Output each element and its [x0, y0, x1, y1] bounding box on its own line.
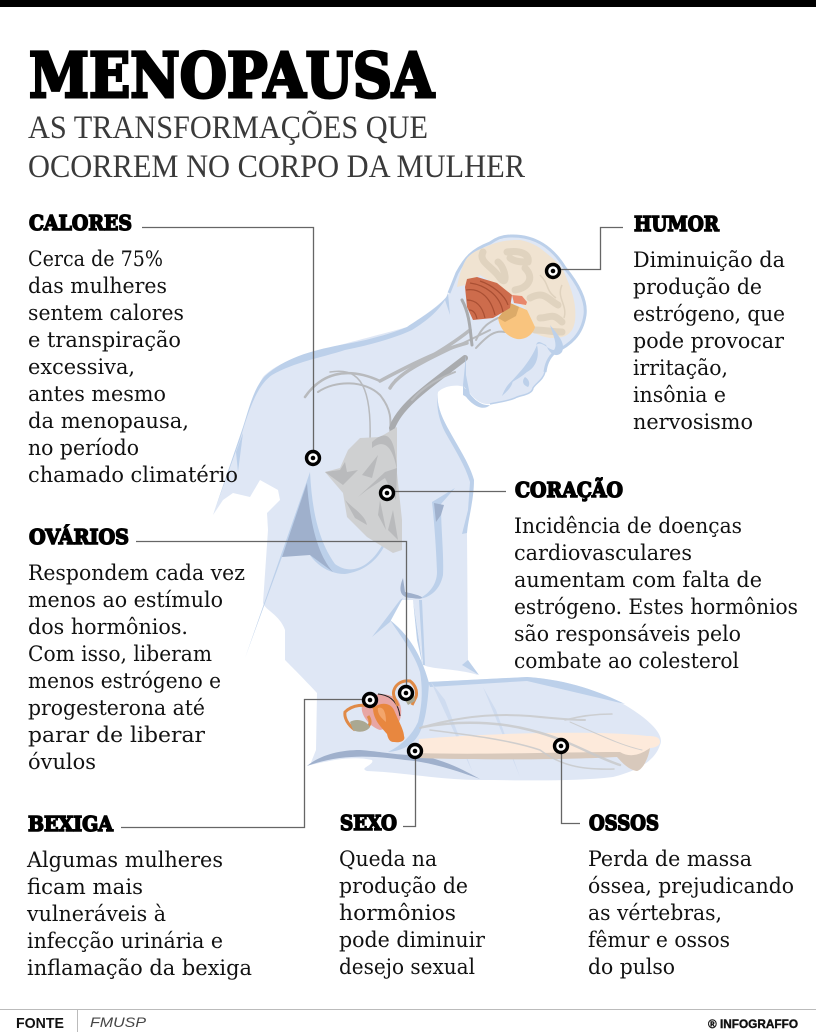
target marker: calores [306, 452, 320, 464]
panel: calores: e transpiração [28, 328, 181, 353]
panel: bexiga: Algumas mulheres [26, 848, 223, 873]
callout leader lines [121, 228, 623, 828]
panel: ovarios: parar de liberar [28, 723, 206, 748]
darker shadow folds [282, 483, 480, 779]
panel: humor [633, 212, 785, 435]
panel: ovarios: menos ao estímulo [28, 588, 223, 613]
panel: coracao: cardiovasculares [514, 541, 692, 566]
brain cortex [457, 240, 575, 338]
footer: FONTE [16, 1015, 64, 1032]
panel: ossos: OSSOS [589, 811, 659, 835]
cerebellum [465, 277, 512, 320]
panel: calores: CALORES [29, 211, 132, 235]
panel: sexo: SEXO [340, 811, 397, 835]
subtitle: AS TRANSFORMAÇÕES QUE [28, 109, 428, 146]
panel: ossos: do pulso [588, 955, 675, 980]
panel: calores: sentem calores [28, 301, 184, 326]
footer: ® INFOGRAFFO [708, 1017, 798, 1031]
panel: calores: excessiva, [28, 355, 135, 380]
panel: calores [28, 211, 238, 488]
target marker: sexo [408, 744, 422, 758]
panel: calores: no período [28, 436, 139, 461]
panel: ovarios: dos hormônios. [28, 615, 188, 640]
panel: ovarios [28, 525, 245, 775]
panel: humor: estrógeno, que [633, 302, 785, 327]
panel: humor: pode provocar [633, 329, 785, 354]
thigh veins [420, 714, 642, 769]
face details [463, 325, 563, 405]
footer: FMUSP [90, 1014, 147, 1030]
panel: bexiga: infecção urinária e [27, 929, 223, 954]
femur bone [419, 733, 660, 771]
blue body contours [213, 236, 625, 777]
panel: ossos: Perda de massa [588, 847, 752, 872]
footer [0, 1009, 816, 1032]
panel: ossos: óssea, prejudicando [588, 874, 794, 899]
panel: humor: HUMOR [634, 212, 720, 236]
panel: humor: Diminuição da [633, 248, 785, 273]
panel: coracao: CORAÇÃO [515, 478, 623, 502]
panel: ovarios: menos estrógeno e [28, 669, 221, 694]
panel: ossos: as vértebras, [588, 901, 722, 926]
panel: ovarios: óvulos [28, 750, 96, 775]
illustration: female body in profile [213, 236, 661, 780]
panel: sexo: hormônios [339, 901, 456, 926]
subtitle [28, 109, 525, 185]
panel: ossos [588, 811, 794, 980]
heart [325, 427, 402, 553]
nerves from brain to chest [305, 300, 505, 440]
target marker: ossos [554, 740, 568, 752]
panel: bexiga: vulneráveis à [26, 902, 166, 927]
orange brain stem [498, 303, 535, 339]
panel: coracao: Incidência de doenças [514, 514, 742, 539]
panel: coracao: aumentam com falta de [514, 568, 762, 593]
panel: sexo: produção de [339, 874, 468, 899]
panel: bexiga: inflamação da bexiga [27, 956, 252, 981]
panel: ovarios: Respondem cada vez [28, 561, 245, 586]
panel: humor: nervosismo [633, 410, 753, 435]
panel: coracao: são responsáveis pelo [514, 622, 741, 647]
panel: bexiga: ficam mais [27, 875, 143, 900]
panel: calores: antes mesmo [28, 382, 166, 407]
panel: calores: Cerca de 75% [28, 247, 163, 272]
body silhouette [213, 236, 661, 780]
panel: sexo: pode diminuir [339, 928, 486, 953]
panel: bexiga [26, 812, 252, 981]
panel: calores: das mulheres [28, 274, 167, 299]
panel: coracao: estrógeno. Estes hormônios [514, 595, 798, 620]
panel: humor: irritação, [633, 356, 728, 381]
panel: coracao [514, 478, 798, 674]
subtitle: OCORREM NO CORPO DA MULHER [28, 149, 525, 185]
target marker: humor [546, 264, 560, 278]
target marker: ovarios [400, 686, 412, 700]
panel: ovarios: progesterona até [28, 696, 205, 721]
panel: calores: da menopausa, [28, 409, 189, 434]
panel: sexo [339, 811, 486, 980]
panel: sexo: desejo sexual [339, 955, 475, 980]
panel: bexiga: BEXIGA [28, 812, 114, 836]
panel: coracao: combate ao colesterol [514, 649, 739, 674]
panel: ossos: fêmur e ossos [588, 928, 730, 953]
uterus and ovaries [345, 681, 417, 742]
panel: sexo: Queda na [339, 847, 437, 872]
small red gland [512, 295, 527, 305]
panel: ovarios: Com isso, liberam [28, 642, 212, 667]
target marker: coracao [380, 486, 394, 500]
panel: calores: chamado climatério [28, 463, 238, 488]
panel: humor: produção de [633, 275, 762, 300]
panel: humor: insônia e [633, 383, 726, 408]
title: MENOPAUSA [29, 39, 435, 112]
panel: ovarios: OVÁRIOS [29, 525, 129, 549]
target marker: bexiga [364, 694, 376, 706]
